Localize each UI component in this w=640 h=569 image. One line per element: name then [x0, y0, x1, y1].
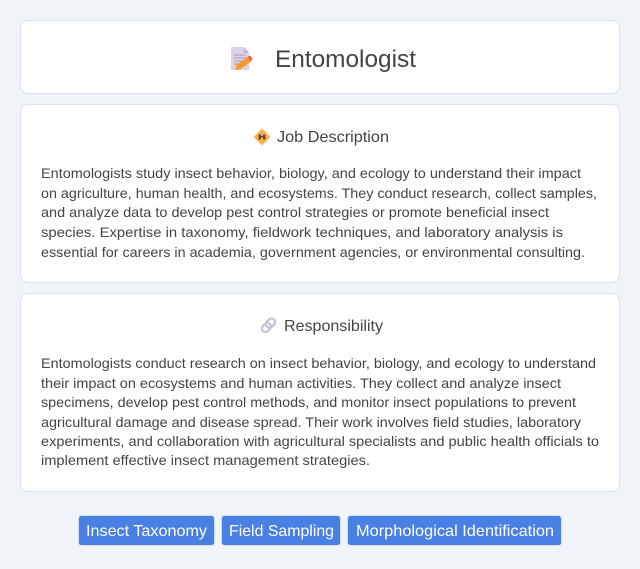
text: job description body — [41, 165, 597, 260]
tag: field sampling — [222, 516, 340, 546]
tag: morphological identification: Morphological Identification — [356, 523, 554, 540]
icon: chain link — [260, 317, 277, 334]
text: responsibility body: their impact on ecosystems and human activities. They collect and analyze insect — [41, 375, 561, 391]
icon: document with pencil — [231, 47, 252, 70]
text: responsibility body: agricultural damage and disease spread. Their work involves field studies, laboratory — [41, 414, 581, 430]
text: responsibility body: implement effective insect management strategies. — [41, 452, 370, 468]
tag: morphological identification — [348, 516, 562, 546]
text: responsibility body — [41, 355, 599, 468]
panel: title card — [20, 20, 620, 94]
tag: field sampling: Field Sampling — [229, 523, 334, 540]
panel: responsibility — [20, 294, 620, 492]
heading: responsibility: Responsibility — [284, 318, 383, 335]
text: responsibility body: experiments, and collaboration with agricultural specialists and public health officials to — [41, 433, 599, 449]
text: job description body: essential for careers in academia, government agencies, or environmental consulting. — [41, 244, 585, 260]
title: Entomologist — [275, 46, 416, 73]
panel: job description — [20, 104, 620, 282]
text: job description body: and analyze data to develop pest control strategies or promote beneficial insect — [41, 204, 549, 220]
tag: insect taxonomy: Insect Taxonomy — [86, 523, 207, 540]
text: job description body: on agriculture, human health, and ecosystems. They conduct research, collect samples, — [41, 185, 597, 201]
text: responsibility body: Entomologists conduct research on insect behavior, biology, and ecology to understand — [41, 355, 596, 371]
heading: job description: Job Description — [277, 129, 389, 146]
text: responsibility body: specimens, develop pest control methods, and monitor insect populations to prevent — [41, 394, 576, 410]
tag: insect taxonomy — [78, 516, 214, 546]
icon: orange diamond — [254, 128, 270, 146]
text: job description body: Entomologists study insect behavior, biology, and ecology to understand their impact — [41, 165, 581, 181]
text: job description body: species. Expertise in taxonomy, fieldwork techniques, and laboratory analysis is — [41, 224, 563, 240]
